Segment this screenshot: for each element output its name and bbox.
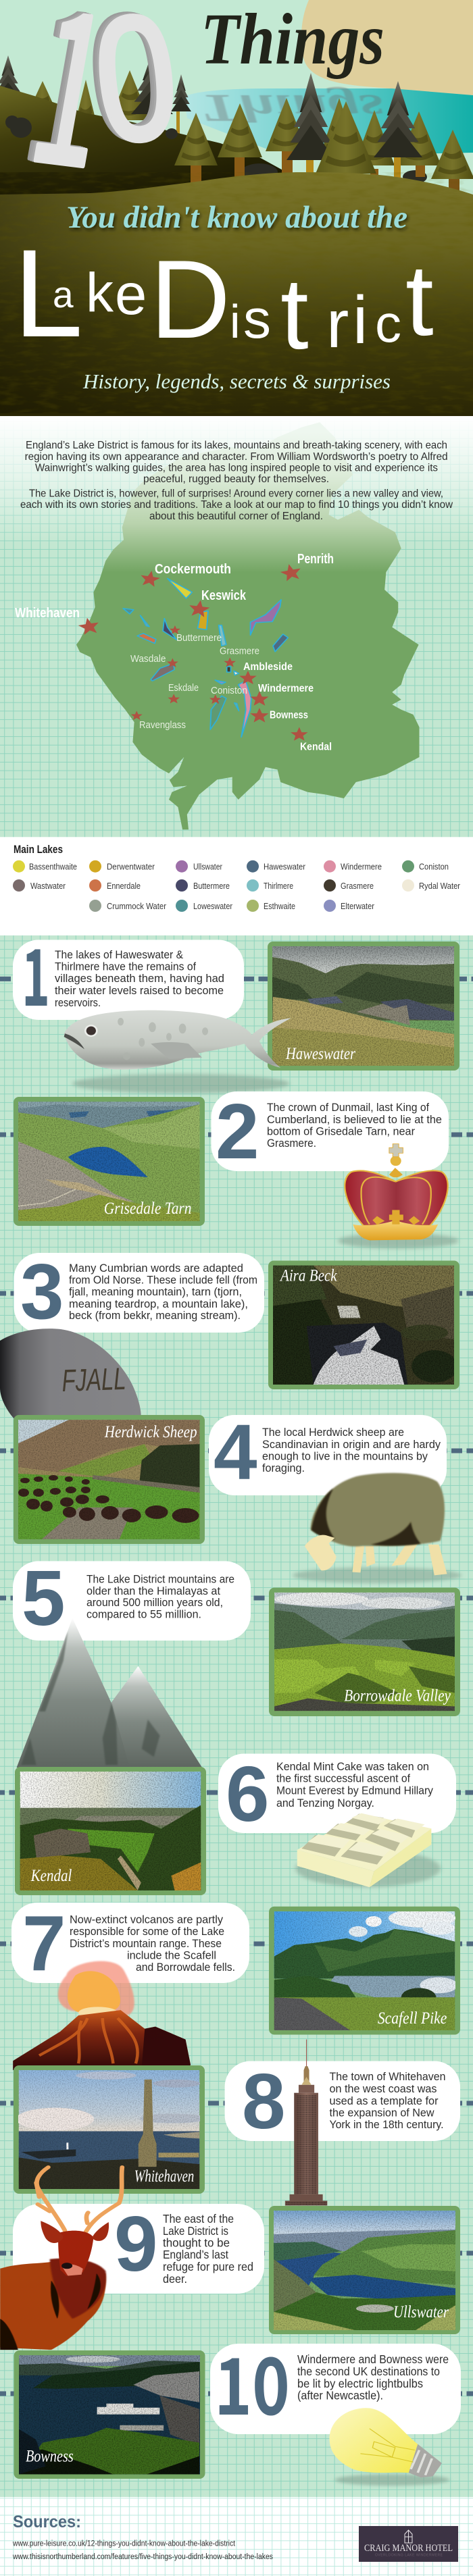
legend dots — [13, 860, 414, 912]
subtitle: You didn't know about the: You didn't know about the — [66, 200, 407, 235]
illustration: volcano — [13, 1961, 191, 2070]
fact 4 text: foraging. — [262, 1462, 305, 1474]
legend names: Rydal Water — [419, 881, 461, 891]
sheep body — [311, 1473, 445, 1547]
fact 4 bubble — [209, 1415, 447, 1495]
fact 1 text — [55, 949, 224, 1009]
caption: Scafell Pike: Scafell Pike — [378, 2009, 447, 2028]
fact 6 text — [276, 1761, 434, 1809]
fact 7 text: include the Scafell — [127, 1950, 216, 1962]
map labels — [15, 552, 334, 753]
fact 7 text — [70, 1914, 235, 1974]
map labels: Buttermere — [176, 633, 222, 644]
legend names: Crummock Water — [107, 901, 167, 911]
title: Lake District: k — [86, 262, 114, 324]
title: Lake District: L — [14, 224, 83, 363]
fact 3 text: beck (from bekkr, meaning stream). — [69, 1310, 241, 1322]
fact 9 text: refuge for pure red — [163, 2260, 253, 2273]
fact 2 text: Grasmere. — [267, 1137, 316, 1150]
panel: fact 4 — [14, 1408, 447, 1544]
fact 10 text: Windermere and Bowness were — [297, 2352, 449, 2366]
title: Lake District: c — [375, 294, 401, 353]
fact 2 text: bottom of Grisedale Tarn, near — [267, 1125, 415, 1137]
fact 2 bubble — [211, 1091, 449, 1171]
fact 1 number: 1 — [22, 915, 50, 1029]
header background — [0, 0, 473, 416]
map section background — [0, 416, 473, 838]
legend names: Bassenthwaite — [29, 862, 77, 871]
map labels: Eskdale — [168, 683, 199, 694]
panel: fact 8 — [14, 2057, 460, 2194]
legend names: Loweswater — [193, 901, 233, 911]
fact 5 text: compared to 55 milllion. — [86, 1609, 201, 1621]
map labels: Grasmere — [220, 646, 259, 656]
legend names: Ennerdale — [107, 881, 141, 891]
logo: Craig Manor Hotel: CRAIG MANOR HOTEL — [364, 2543, 453, 2554]
fact 2 number: 2 — [216, 1087, 259, 1175]
left hill — [0, 86, 318, 216]
legend names: Coniston — [419, 862, 449, 871]
fact 5 text: The Lake District mountains are — [86, 1573, 234, 1585]
legend names: Derwentwater — [107, 862, 155, 871]
fact 4 number: 4 — [214, 1408, 257, 1496]
illustration: rock carved with FJALL — [0, 1329, 141, 1422]
fact 10 bubble — [210, 2344, 461, 2434]
fact 2 text: Cumberland, is believed to lie at the — [267, 1114, 442, 1126]
fact 9 text: thought to be — [163, 2236, 230, 2249]
legend title: Main Lakes — [14, 844, 63, 856]
fact 3 number: 3 — [20, 1247, 64, 1335]
panel: fact 3 — [14, 1247, 459, 1389]
illustration: rock carved with FJALL: FJALL — [61, 1361, 126, 1398]
fact 2 text — [267, 1102, 442, 1150]
fact 8 number: 8 — [242, 2057, 286, 2145]
back trees — [0, 53, 191, 162]
fact 4 text: enough to live in the mountains by — [262, 1451, 428, 1463]
fact 8 text — [330, 2071, 446, 2131]
sun disc — [301, 0, 473, 95]
intro text: about this beautiful corner of England. — [149, 511, 323, 522]
intro text — [20, 440, 453, 522]
reflection of Things: Things — [201, 86, 384, 130]
fact 3 text: meaning teardrop, a mountain lake), — [69, 1298, 248, 1310]
fact 6 text: Mount Everest by Edmund Hillary — [276, 1784, 434, 1797]
title: Lake District: e — [115, 263, 147, 327]
title: Lake District: t — [280, 257, 309, 370]
panel: fact 6 — [15, 1750, 456, 1895]
fact 9 photo: Ullswater — [269, 2206, 460, 2334]
fact 9 text: England’s last — [163, 2248, 228, 2261]
fact 8 text: on the west coast was — [330, 2083, 437, 2095]
fact 1 photo: Haweswater — [268, 942, 459, 1071]
fact 2 photo: Grisedale Tarn — [14, 1097, 205, 1226]
map labels: Ravenglass — [139, 720, 186, 731]
map labels: Windermere — [258, 683, 314, 694]
caption: Haweswater: Haweswater — [285, 1045, 355, 1063]
panel: fact 5 — [13, 1554, 460, 1716]
fact 6 photo: Kendal — [15, 1767, 206, 1895]
fact 9 number: 9 — [114, 2200, 158, 2288]
intro text: Wainwright’s walking guides, the area has long inspired people to visit and experience its — [35, 462, 438, 474]
fact 3 text — [69, 1262, 257, 1322]
legend names: Grasmere — [341, 881, 374, 891]
fact 5 text: around 500 million years old, — [86, 1597, 223, 1609]
map labels: Keswick — [201, 588, 247, 603]
fact 6 text: Kendal Mint Cake was taken on — [276, 1761, 429, 1773]
fact 10 text — [297, 2352, 449, 2402]
illustration: fish — [64, 1010, 291, 1093]
fact 1 text: The lakes of Haweswater & — [55, 949, 183, 961]
fact 1 bubble — [13, 940, 244, 1020]
logo: Craig Manor Hotel: OVERLOOKING LAKE WINDERMERE — [375, 2553, 443, 2557]
source links: www.thisisnorthumberland.com/features/five-things-you-didnt-know-about-the-lakes — [12, 2553, 273, 2561]
deer head — [58, 2231, 93, 2276]
intro text: region having its own appearance and character. From William Wordsworth’s poetry to Alfred — [25, 451, 448, 463]
fact 9 text — [163, 2212, 253, 2286]
foreground hill — [0, 172, 473, 416]
fact 10 text: (after Newcastle). — [297, 2389, 383, 2402]
fact 2 text: The crown of Dunmail, last King of — [267, 1102, 429, 1114]
facts section background — [0, 935, 473, 2497]
fact 8 text: The town of Whitehaven — [330, 2071, 446, 2083]
map labels: Bowness — [270, 710, 308, 721]
cake segments — [301, 1813, 425, 1865]
fact 1 text: Thirlmere have the remains of — [55, 960, 196, 973]
illustration: mountains — [17, 1618, 202, 1768]
fact 5 text — [86, 1573, 234, 1621]
legend names: Buttermere — [193, 881, 230, 891]
fact 9 text: The east of the — [163, 2212, 234, 2225]
map labels: Ambleside — [243, 661, 293, 673]
deer body — [0, 2261, 106, 2350]
fact 3 text: Many Cumbrian words are adapted — [69, 1262, 243, 1274]
illustration: Empire State Building — [285, 2040, 327, 2206]
fact 6 bubble — [218, 1753, 456, 1833]
fact 5 text: older than the Himalayas at — [86, 1585, 220, 1597]
intro text: The Lake District is, however, full of surprises! Around every corner lies a new valley and view, — [29, 488, 443, 500]
illustration: lightbulb — [329, 2408, 449, 2485]
fact 4 photo: Herdwick Sheep — [14, 1415, 205, 1544]
bushes — [5, 115, 427, 184]
legend names: Windermere — [341, 862, 382, 871]
title: Lake District: i — [230, 295, 241, 348]
fact 4 text: The local Herdwick sheep are — [262, 1426, 404, 1439]
panel: fact 1 — [13, 915, 459, 1071]
map labels: Cockermouth — [155, 562, 231, 577]
caption: Aira Beck: Aira Beck — [279, 1267, 337, 1285]
map landmass — [76, 422, 419, 829]
legend names: Thirlmere — [264, 881, 293, 891]
fact 6 text: the first successful ascent of — [276, 1772, 410, 1784]
illustration: Kendal mint cake — [295, 1813, 441, 1887]
panel: fact 2 — [14, 1087, 449, 1226]
fact 7 bubble — [11, 1903, 249, 1983]
fact 3 text: from Old Norse. These include fell (from — [69, 1274, 257, 1286]
map labels: Wasdale — [130, 654, 166, 665]
panel: fact 10 — [14, 2324, 461, 2479]
source links: www.pure-leisure.co.uk/12-things-you-didnt-know-about-the-lake-district — [12, 2540, 236, 2548]
intro text: peaceful, rugged beauty for themselves. — [143, 473, 329, 485]
tagline: History, legends, secrets & surprises — [82, 369, 391, 393]
fact 7 text: Now-extinct volcanos are partly — [70, 1914, 224, 1926]
sources heading: Sources: — [13, 2513, 81, 2531]
fact 5 bubble — [13, 1561, 251, 1641]
fact 8 bubble — [225, 2061, 460, 2141]
caption: Bowness: Bowness — [26, 2447, 74, 2465]
fact 7 text: District’s mountain range. These — [70, 1938, 222, 1950]
map labels: Coniston — [211, 686, 247, 696]
title: Lake District: i — [353, 282, 368, 358]
fact 3 bubble — [14, 1253, 264, 1333]
fact 3 text: fjall, meaning mountain), tarn (tjorn, — [69, 1286, 242, 1298]
fact 6 text: and Tenzing Norgay. — [276, 1797, 374, 1809]
fact 7 number: 7 — [22, 1900, 66, 1988]
panel: main lakes legend — [0, 837, 473, 935]
fact 1 text: villages beneath them, having had — [55, 973, 224, 985]
illustration: red deer — [0, 2167, 122, 2350]
fact 5 number: 5 — [22, 1554, 66, 1642]
fact 8 text: the expansion of New — [330, 2107, 434, 2119]
sheep legs — [352, 1538, 447, 1575]
fact 4 text — [262, 1426, 441, 1474]
panel: fact 7 — [11, 1900, 460, 2034]
fact 8 text: used as a template for — [330, 2095, 439, 2107]
legend names: Esthwaite — [264, 901, 295, 911]
fact 5 photo: Borrowdale Valley — [269, 1588, 460, 1716]
panel: fact 9 — [13, 2200, 460, 2334]
map of the Lake District — [15, 422, 419, 829]
foreground trees — [174, 73, 473, 190]
illustration: sheep — [293, 1473, 462, 1583]
fact 10 text: the second UK destinations to — [297, 2365, 440, 2378]
title: Lake District: s — [243, 288, 271, 350]
"Things" title: Things — [201, 0, 384, 80]
map labels: Kendal — [300, 742, 332, 753]
fact 7 photo: Scafell Pike — [269, 1907, 460, 2034]
fact 10 number: 10 — [214, 2324, 290, 2438]
fact 1 text: reservoirs. — [55, 997, 101, 1009]
dashed connector lines — [0, 979, 473, 2394]
fact 9 text: deer. — [163, 2272, 187, 2286]
logo: Craig Manor Hotel — [359, 2526, 458, 2562]
title: Lake District: a — [53, 274, 74, 315]
fact 9 bubble — [13, 2204, 264, 2294]
panel: sources footer — [0, 2497, 473, 2576]
sheep head — [305, 1535, 337, 1570]
intro text: each with its own stories and traditions. Take a look at our map to find 10 things you didn’t know — [20, 499, 453, 511]
legend names — [29, 862, 461, 911]
source links — [12, 2540, 273, 2561]
fact 1 text: their water levels raised to become — [55, 985, 224, 997]
fact 10 photo: Bowness — [14, 2350, 205, 2479]
legend names: Haweswater — [264, 862, 306, 871]
legend names: Elterwater — [341, 901, 375, 911]
legend names: Wastwater — [30, 881, 66, 891]
legend names: Ullswater — [193, 862, 223, 871]
lake — [184, 88, 473, 155]
fact 10 text: be lit by electric lightbulbs — [297, 2377, 423, 2390]
fact 9 text: Lake District is — [163, 2224, 228, 2238]
fact 8 photo: Whitehaven — [14, 2065, 207, 2194]
title: Lake District: t — [405, 243, 434, 357]
map stars — [77, 563, 308, 741]
title: Lake District: D — [150, 237, 230, 361]
intro text: England’s Lake District is famous for its lakes, mountains and breath-taking scenery, with each — [26, 440, 447, 451]
map labels: Penrith — [297, 552, 334, 567]
fact 6 number: 6 — [226, 1750, 270, 1838]
logo icon — [405, 2530, 412, 2543]
title: Lake District: r — [326, 286, 349, 362]
fact 8 text: York in the 18th century. — [330, 2119, 443, 2131]
fact 3 photo: Aira Beck — [268, 1260, 459, 1389]
fact 4 text: Scandinavian in origin and are hardy — [262, 1439, 441, 1451]
map labels: Whitehaven — [15, 606, 80, 621]
illustration: crown — [338, 1143, 459, 1249]
fact 7 text: and Borrowdale fells. — [136, 1961, 235, 1974]
lakes on map — [123, 578, 288, 737]
caption: Kendal: Kendal — [30, 1867, 72, 1885]
deer antlers — [36, 2167, 122, 2232]
fact 7 text: responsible for some of the Lake — [70, 1926, 224, 1938]
